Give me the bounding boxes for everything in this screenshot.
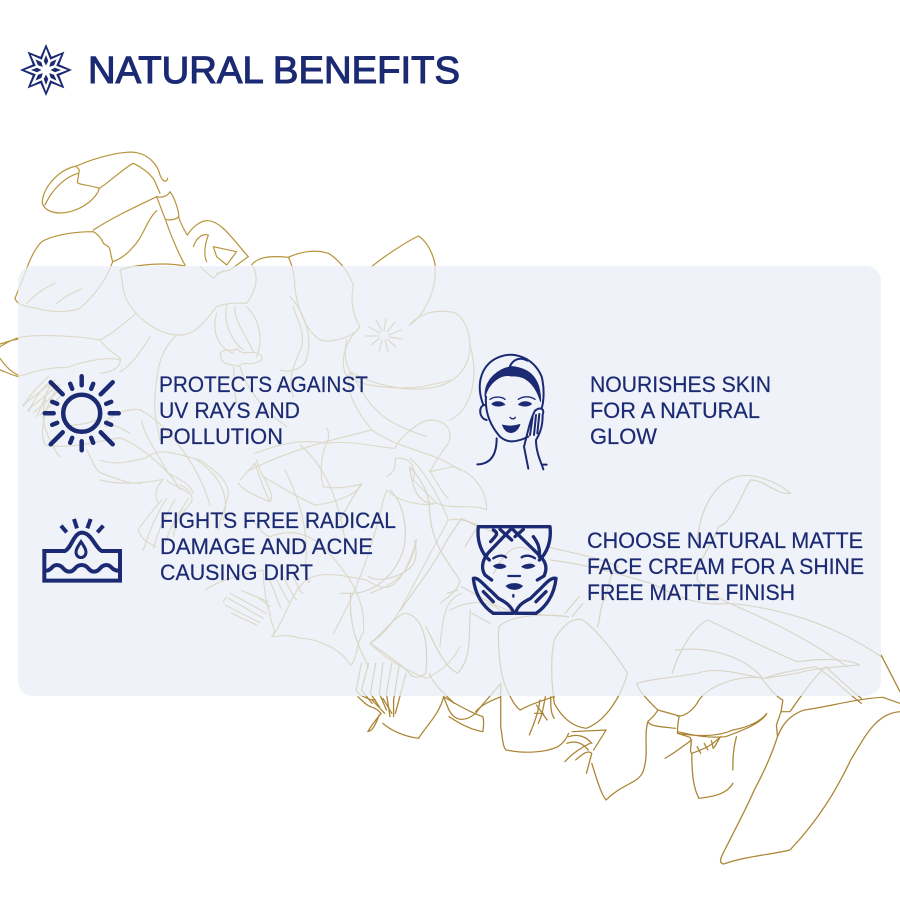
text: choose natural matte: FACE CREAM FOR A SHINE [587,554,864,579]
text: nourishes skin: NOURISHES SKIN [590,372,771,397]
text: choose natural matte [587,528,864,605]
title: NATURAL BENEFITS [88,50,460,92]
text: fights free radical: FIGHTS FREE RADICAL [160,508,396,533]
icon: sun [45,376,119,450]
text: nourishes skin: FOR A NATURAL [590,398,760,423]
text: choose natural matte: FREE MATTE FINISH [587,580,795,605]
text: protects against uv: UV RAYS AND [159,398,300,423]
text: nourishes skin [590,372,771,449]
text: fights free radical [160,508,396,585]
icon: woman touching face [477,355,547,469]
text: nourishes skin: GLOW [590,424,657,449]
text: fights free radical: DAMAGE AND ACNE [160,534,373,559]
icon: face with towel and hands [473,527,556,613]
text: protects against uv: PROTECTS AGAINST [159,372,368,397]
floral line illustration [0,152,900,864]
text: protects against uv: POLLUTION [159,424,283,449]
text: protects against uv [159,372,368,449]
text: choose natural matte: CHOOSE NATURAL MATTE [587,528,863,553]
text: fights free radical: CAUSING DIRT [160,560,313,585]
icon: skin water drop [44,519,120,581]
panel background [18,266,881,696]
icon: logo flower [20,44,72,96]
